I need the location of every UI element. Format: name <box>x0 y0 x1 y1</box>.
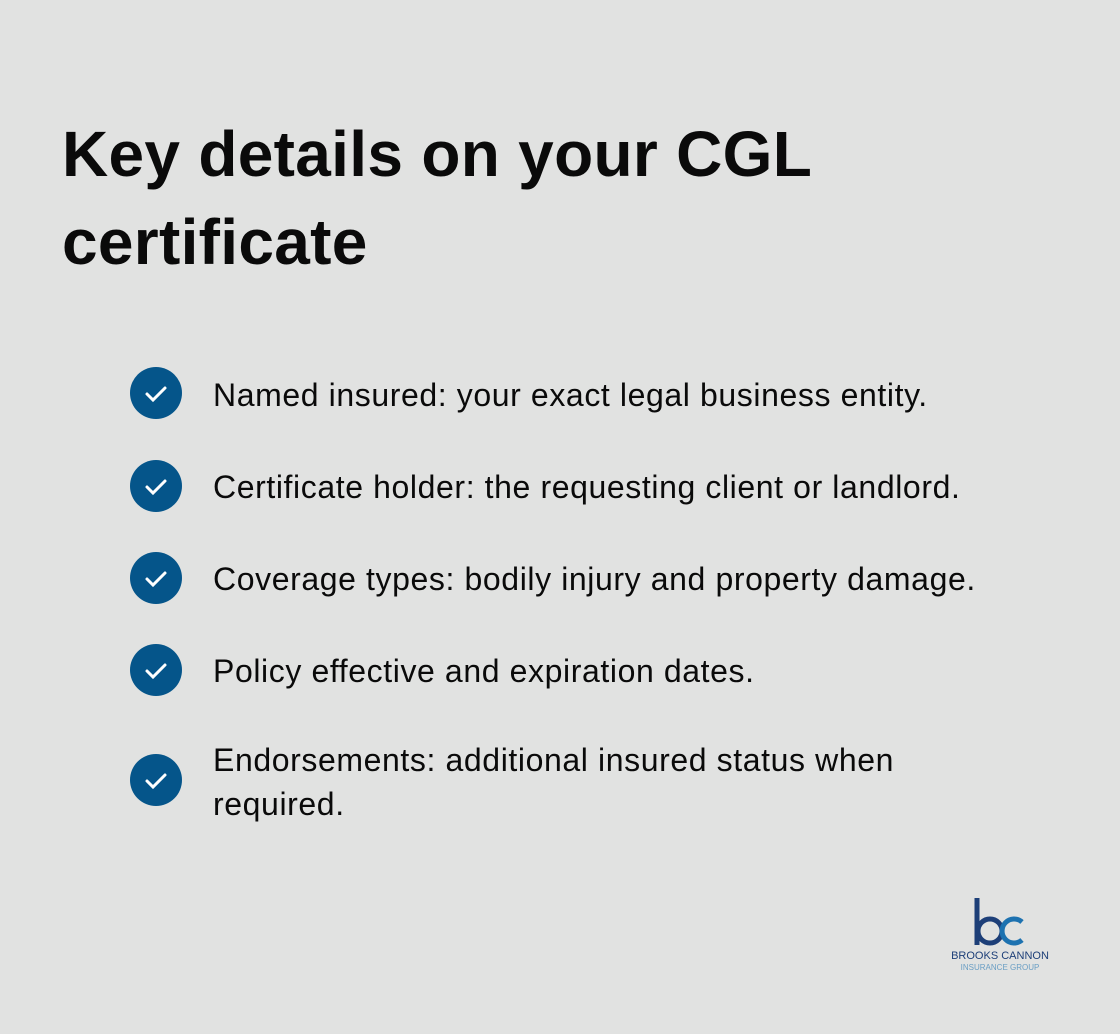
icon: check <box>130 552 182 604</box>
title: Key details on your CGL <box>62 118 812 190</box>
text: Policy effective and expiration dates. <box>213 653 755 689</box>
text: Named insured: your exact legal business entity. <box>213 377 928 413</box>
item 3 <box>130 552 976 604</box>
text <box>213 742 894 822</box>
logo: INSURANCE GROUP <box>961 963 1039 972</box>
item 4 <box>130 644 755 696</box>
logo <box>951 898 1049 972</box>
text: required. <box>213 786 345 822</box>
text: Coverage types: bodily injury and property damage. <box>213 561 976 597</box>
item 1 <box>130 367 928 419</box>
icon: check <box>130 644 182 696</box>
icon: check <box>130 460 182 512</box>
icon: check <box>130 754 182 806</box>
title: certificate <box>62 206 368 278</box>
item 5 <box>130 742 894 822</box>
title <box>62 118 812 278</box>
icon: check <box>130 367 182 419</box>
logo: BROOKS CANNON <box>951 950 1049 962</box>
text: Endorsements: additional insured status when <box>213 742 894 778</box>
item 2 <box>130 460 960 512</box>
text: Certificate holder: the requesting client or landlord. <box>213 469 960 505</box>
